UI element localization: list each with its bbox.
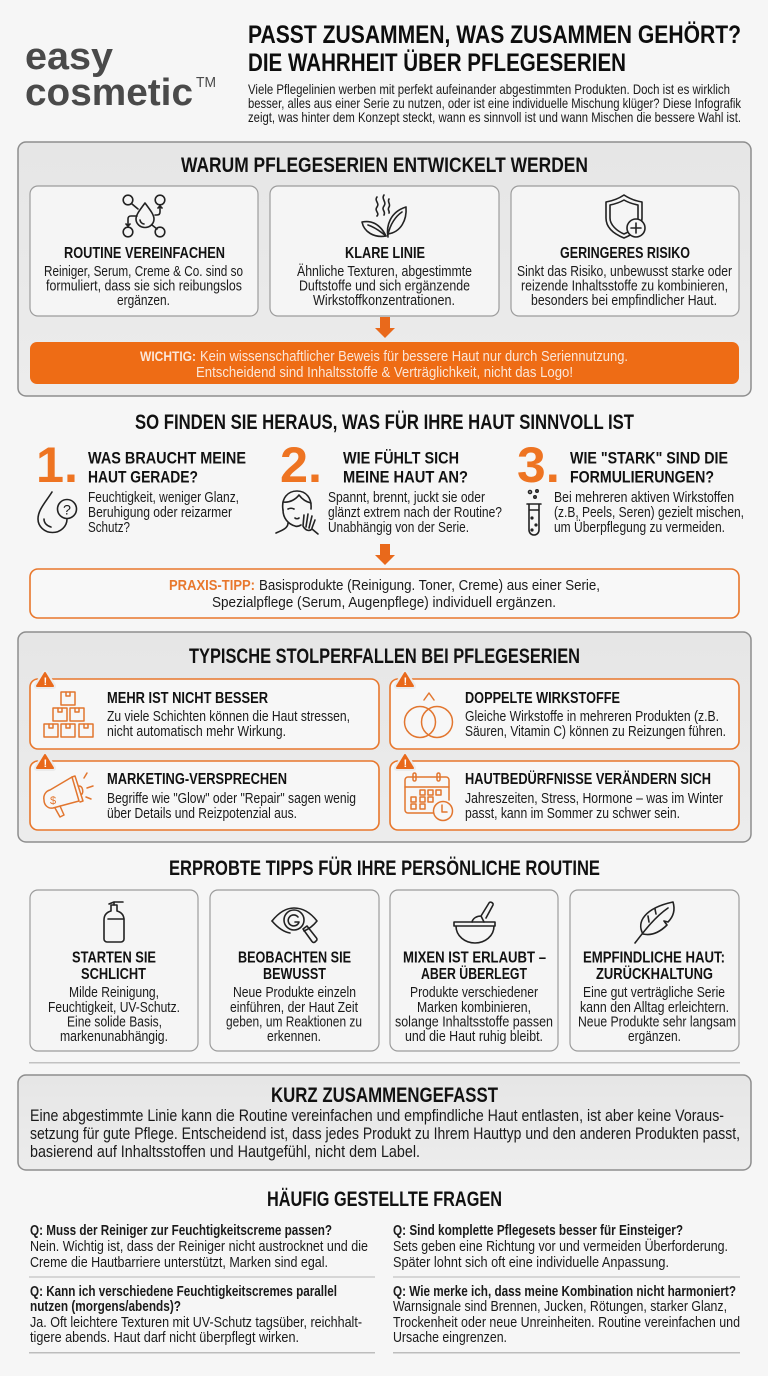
step 3 text	[554, 490, 744, 536]
card text: geben, um Reaktionen zu	[226, 1014, 362, 1030]
card title: STARTEN SIE	[72, 950, 156, 966]
warning triangle	[397, 755, 413, 770]
step 2 text	[328, 490, 502, 536]
step 3	[517, 437, 744, 536]
callout: praxis-tipp: Spezialpflege (Serum, Augenpflege) individuell ergänzen.	[212, 594, 556, 611]
icon: megaphone: $	[50, 795, 56, 807]
step 1 text	[88, 490, 239, 536]
card text: Ähnliche Texturen, abgestimmte	[297, 263, 472, 280]
callout: wichtig: Entscheidend sind Inhaltsstoffe & Verträglichkeit, nicht das Logo!	[196, 365, 573, 381]
card text	[107, 709, 350, 740]
card title: MARKETING-VERSPRECHEN	[107, 771, 287, 788]
card text: Milde Reinigung,	[69, 985, 159, 1001]
heading: erprobte tipps: ERPROBTE TIPPS FÜR IHRE PERSÖNLICHE ROUTINE	[169, 857, 600, 880]
card text: Eine solide Basis,	[67, 1014, 162, 1030]
callout: wichtig: Kein wissenschaftlicher Beweis für bessere Haut nur durch Seriennutzung.	[200, 349, 628, 365]
faq: reiniger	[29, 1223, 375, 1278]
warning triangle	[37, 673, 53, 688]
step 3 heading: FORMULIERUNGEN?	[570, 468, 714, 486]
faq: kombination: Ursache eingrenzen.	[393, 1329, 507, 1346]
tip card: starten sie schlicht	[30, 890, 198, 1051]
tip card: mixen ist erlaubt	[390, 890, 558, 1051]
faq: reiniger: Creme die Hautbarriere unterstützt, Marken sind egal.	[30, 1254, 328, 1271]
step 1 text: Feuchtigkeit, weniger Glanz,	[88, 490, 239, 506]
card text: ergänzen.	[117, 293, 170, 309]
number 2: 2.	[280, 437, 322, 493]
card text: Produkte verschiedener	[410, 985, 538, 1001]
card text	[48, 985, 180, 1045]
step 2 text: Spannt, brennt, juckt sie oder	[328, 490, 485, 506]
icon: drop with question mark: ?	[63, 502, 71, 518]
card text	[297, 263, 472, 309]
icon: bowl and spatula	[454, 902, 495, 943]
warning card: marketing-versprechen	[30, 755, 379, 830]
card text: erkennen.	[267, 1029, 321, 1045]
icon: overlapping circles	[404, 693, 452, 738]
card title: EMPFINDLICHE HAUT:	[583, 950, 725, 966]
step 1	[36, 437, 246, 536]
heading: so finden sie heraus: SO FINDEN SIE HERAUS, WAS FÜR IHRE HAUT SINNVOLL IST	[135, 411, 634, 434]
tip card: beobachten sie bewusst	[210, 890, 379, 1051]
card: routine vereinfachen	[30, 186, 258, 316]
card title: BEWUSST	[263, 966, 326, 983]
callout: praxis-tipp: PRAXIS-TIPP:	[169, 578, 255, 594]
card title: GERINGERES RISIKO	[560, 245, 690, 262]
number 3: 3.	[517, 437, 560, 493]
faq: reiniger: Nein. Wichtig ist, dass der Reiniger nicht austrocknet und die	[30, 1238, 368, 1255]
card text	[578, 985, 736, 1045]
card title: MIXEN IST ERLAUBT –	[403, 950, 546, 966]
faq: pflegesets: Später lohnt sich oft eine individuelle Anpassung.	[393, 1254, 669, 1271]
card text: besonders bei empfindlicher Haut.	[531, 293, 717, 309]
arrow	[375, 544, 395, 565]
card text	[465, 791, 723, 822]
icon: face with hand	[276, 491, 318, 534]
step 3 text: um Überpflegung zu vermeiden.	[554, 518, 725, 536]
card text: kann den Alltag erleichtern.	[580, 1000, 729, 1016]
warning triangle: !	[404, 676, 407, 688]
card title	[583, 950, 725, 983]
number 1: 1.	[36, 437, 78, 493]
intro text	[248, 81, 742, 125]
step 2	[276, 437, 502, 536]
card text: über Details und Reizpotenzial aus.	[107, 806, 297, 822]
logo: TM	[196, 74, 216, 91]
step 1 heading	[88, 450, 246, 486]
callout: wichtig	[30, 342, 739, 384]
warning triangle: !	[44, 676, 47, 688]
card title: BEOBACHTEN SIE	[238, 950, 351, 966]
warning card: mehr ist nicht besser	[30, 673, 379, 749]
panel: warum pflegeserien entwickelt werden	[18, 142, 751, 396]
faq: pflegesets: Q: Sind komplette Pflegesets besser für Einsteiger?	[393, 1223, 683, 1239]
card text: Eine gut verträgliche Serie	[583, 985, 725, 1001]
warning triangle	[397, 673, 413, 688]
icon: pump bottle	[104, 902, 124, 942]
card text	[44, 264, 243, 309]
card text: Wirkstoffkonzentrationen.	[313, 293, 455, 309]
card text: markenunabhängig.	[60, 1029, 168, 1045]
card text: ergänzen.	[628, 1029, 681, 1045]
faq: reiniger: Q: Muss der Reiniger zur Feuchtigkeitscreme passen?	[30, 1223, 332, 1239]
card text: Reiniger, Serum, Creme & Co. sind so	[44, 264, 243, 280]
icon: shield with plus	[606, 195, 645, 238]
icon: drop network	[123, 195, 165, 237]
card text: einführen, der Haut Zeit	[230, 1000, 358, 1016]
card text: Jahreszeiten, Stress, Hormone – was im Winter	[465, 791, 723, 807]
step 2 text: Unabhängig von der Serie.	[328, 520, 469, 536]
card text: und die Haut ruhig bleibt.	[405, 1029, 543, 1045]
logo	[25, 36, 216, 114]
faq: pflegesets	[393, 1223, 740, 1278]
card text	[226, 985, 362, 1045]
card text: reizende Inhaltsstoffe zu kombinieren,	[521, 278, 728, 294]
step 3 heading: WIE "STARK" SIND DIE	[570, 450, 728, 468]
summary text	[30, 1107, 740, 1161]
icon: feather	[635, 902, 674, 943]
card text: passt, kann im Sommer zu schwer sein.	[465, 806, 680, 822]
card text: Begriffe wie "Glow" oder "Repair" sagen wenig	[107, 791, 356, 807]
step 1 heading: WAS BRAUCHT MEINE	[88, 450, 246, 468]
card title: ROUTINE VEREINFACHEN	[64, 245, 225, 262]
card text: Neue Produkte einzeln	[233, 985, 356, 1001]
callout: praxis-tipp	[30, 569, 739, 618]
card text	[107, 791, 356, 822]
step 2 text: glänzt extrem nach der Routine?	[328, 505, 502, 521]
title: DIE WAHRHEIT ÜBER PFLEGESERIEN	[248, 48, 626, 77]
step 1 text: Beruhigung oder reizarmer	[88, 505, 232, 521]
card title: KLARE LINIE	[345, 245, 425, 262]
card title: ABER ÜBERLEGT	[421, 964, 527, 983]
card title	[72, 950, 156, 983]
warning card: doppelte wirkstoffe	[390, 673, 739, 749]
step 2 heading	[343, 448, 468, 486]
card text: Feuchtigkeit, UV-Schutz.	[48, 1000, 180, 1016]
card text: Marken kombinieren,	[417, 1000, 531, 1016]
callout: wichtig: WICHTIG:	[140, 348, 196, 364]
arrow	[375, 317, 395, 338]
step 2 heading: WIE FÜHLT SICH	[343, 448, 459, 468]
warning triangle: !	[44, 758, 47, 770]
step 3 text: Bei mehreren aktiven Wirkstoffen	[554, 490, 734, 506]
icon: leaves and steam	[362, 195, 406, 237]
faq: feuchtigkeitscremes: tigere abends. Haut darf nicht überpflegt wirken.	[30, 1329, 299, 1346]
card: geringeres risiko	[511, 186, 739, 316]
card title: MEHR IST NICHT BESSER	[107, 690, 268, 707]
card title: ZURÜCKHALTUNG	[596, 964, 713, 983]
heading: warum: WARUM PFLEGESERIEN ENTWICKELT WERDEN	[181, 154, 588, 177]
warning triangle: !	[404, 758, 407, 770]
callout: praxis-tipp: Basisprodukte (Reinigung. Toner, Creme) aus einer Serie,	[259, 577, 600, 594]
heading: kurz zusammengefasst: KURZ ZUSAMMENGEFASST	[271, 1084, 498, 1107]
card title: DOPPELTE WIRKSTOFFE	[465, 690, 620, 707]
icon: megaphone	[44, 773, 93, 817]
tip card: empfindliche haut	[570, 890, 739, 1051]
card text: Gleiche Wirkstoffe in mehreren Produkten (z.B.	[465, 709, 719, 725]
card title: HAUTBEDÜRFNISSE VERÄNDERN SICH	[465, 769, 711, 788]
icon: stacked boxes	[44, 692, 93, 737]
card title	[238, 950, 351, 983]
card text: Zu viele Schichten können die Haut stressen,	[107, 709, 350, 725]
logo: cosmetic	[25, 72, 193, 114]
card text	[465, 709, 726, 740]
warning triangle	[37, 755, 53, 770]
icon: calendar with clock	[405, 773, 452, 820]
title	[248, 20, 741, 77]
card text: Neue Produkte sehr langsam	[578, 1014, 736, 1030]
card text: Duftstoffe und sich ergänzende	[299, 278, 470, 294]
faq: feuchtigkeitscremes: nutzen (morgens/abends)?	[30, 1299, 181, 1315]
card: klare linie	[270, 186, 499, 316]
card text: Sinkt das Risiko, unbewusst starke oder	[517, 264, 732, 280]
step 1 text: Schutz?	[88, 520, 130, 536]
step 1 heading: HAUT GERADE?	[88, 468, 198, 486]
card text	[517, 264, 732, 309]
step 2 heading: MEINE HAUT AN?	[343, 468, 468, 486]
summary text: basierend auf Inhaltsstoffen und Hautgefühl, nicht dem Label.	[30, 1143, 420, 1161]
heading: faq: HÄUFIG GESTELLTE FRAGEN	[267, 1188, 502, 1211]
card text	[395, 985, 553, 1045]
card title	[403, 950, 546, 983]
icon: drop with question mark	[38, 492, 76, 532]
panel: typische stolperfallen	[18, 632, 751, 842]
card text: solange Inhaltsstoffe passen	[395, 1014, 553, 1030]
warning card: hautbeduerfnisse	[390, 755, 739, 830]
logo: easy	[25, 36, 113, 78]
card title: SCHLICHT	[81, 966, 146, 983]
faq: feuchtigkeitscremes: Ja. Oft leichtere Texturen mit UV-Schutz tagsüber, reichhalt-	[30, 1314, 362, 1331]
panel: kurz zusammengefasst	[18, 1075, 751, 1170]
faq: feuchtigkeitscremes	[29, 1284, 375, 1354]
faq: feuchtigkeitscremes: Q: Kann ich verschiedene Feuchtigkeitscremes parallel	[30, 1284, 337, 1300]
icon: eye with magnifier	[272, 908, 317, 942]
card text: nicht automatisch mehr Wirkung.	[107, 724, 286, 740]
icon: test tube	[527, 490, 541, 535]
step 3 heading	[570, 450, 728, 486]
faq: kombination	[393, 1284, 740, 1354]
card text: formuliert, dass sie sich reibungslos	[46, 278, 242, 294]
heading: stolperfallen: TYPISCHE STOLPERFALLEN BEI PFLEGESERIEN	[189, 645, 580, 668]
